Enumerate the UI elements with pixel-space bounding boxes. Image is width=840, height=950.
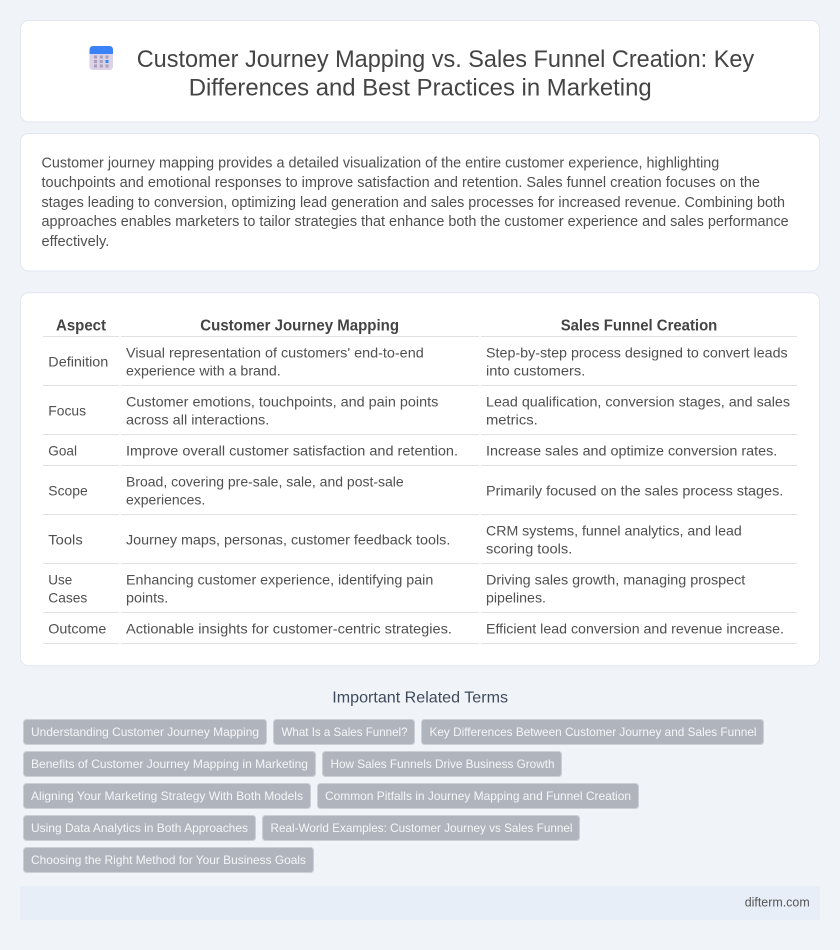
tag: real-world examples (262, 816, 580, 840)
tag: aligning strategy: Aligning Your Marketing Strategy With Both Models (31, 789, 303, 803)
tag: sales funnel: What Is a Sales Funnel? (282, 725, 408, 739)
panel: summary paragraph (20, 134, 820, 271)
tag: real-world examples: Real-World Examples: Customer Journey vs Sales Funnel (270, 821, 572, 835)
table header: Aspect (56, 318, 106, 335)
table header: Sales Funnel Creation (561, 318, 717, 335)
tag: common pitfalls: Common Pitfalls in Journey Mapping and Funnel Creation (325, 789, 631, 803)
tag: key differences: Key Differences Between Customer Journey and Sales Funnel (430, 725, 756, 739)
tag: benefits (24, 752, 316, 776)
text block: summary: approaches enables marketers to tailor strategies that enhance both the customer experience and sales performance (42, 214, 789, 230)
text block: summary (42, 156, 789, 250)
row: scope: Broad, covering pre-sale, sale, and post-sale (126, 474, 404, 490)
tag: data analytics: Using Data Analytics in Both Approaches (31, 821, 248, 835)
row: definition: Visual representation of customers' end-to-end (126, 344, 424, 360)
tag: benefits: Benefits of Customer Journey Mapping in Marketing (31, 757, 308, 771)
title: Customer Journey Mapping vs. Sales Funnel Creation: Key (137, 46, 754, 73)
tag: data analytics (24, 816, 256, 840)
text block: summary: effectively. (42, 234, 109, 250)
panel: title card (20, 20, 820, 122)
row: use cases: Use (48, 572, 72, 588)
row: outcome: Actionable insights for customer-centric strategies. (126, 621, 452, 637)
row: goal (48, 442, 777, 458)
row: goal: Increase sales and optimize conversion rates. (486, 442, 777, 458)
panel: comparison table (20, 293, 820, 666)
row: tools: Journey maps, personas, customer feedback tools. (126, 532, 450, 548)
title (137, 46, 754, 102)
row: use cases: Enhancing customer experience, identifying pain (126, 572, 433, 588)
row: scope: experiences. (126, 492, 205, 508)
row: scope (48, 474, 783, 508)
title: Differences and Best Practices in Marketing (189, 75, 652, 102)
table header: Customer Journey Mapping (200, 318, 399, 335)
tag: understanding: Understanding Customer Journey Mapping (31, 725, 259, 739)
tag: business growth (322, 752, 562, 776)
footer (20, 886, 820, 920)
row: focus: across all interactions. (126, 411, 269, 427)
row: use cases (48, 572, 745, 606)
row: use cases: pipelines. (486, 590, 546, 606)
heading: related terms: Important Related Terms (332, 689, 508, 706)
row: definition: into customers. (486, 362, 585, 378)
row: use cases: Driving sales growth, managing prospect (486, 572, 745, 588)
row: tools (48, 523, 742, 557)
row: scope: Scope (48, 483, 88, 499)
tag: choosing method (24, 848, 314, 872)
row: focus (48, 393, 790, 427)
row: focus: Focus (48, 402, 86, 418)
row: definition: experience with a brand. (126, 362, 281, 378)
row: scope: Primarily focused on the sales process stages. (486, 483, 783, 499)
table header (56, 318, 717, 335)
row: tools: CRM systems, funnel analytics, and lead (486, 523, 742, 539)
row: goal: Improve overall customer satisfaction and retention. (126, 442, 458, 458)
row: outcome: Outcome (48, 621, 107, 637)
tag: understanding (24, 720, 266, 744)
panel: related term tags (24, 720, 764, 872)
row: definition (48, 344, 788, 378)
row: definition: Definition (48, 354, 108, 370)
row: tools: Tools (48, 532, 83, 548)
row: goal: Goal (48, 442, 77, 458)
row: outcome: Efficient lead conversion and revenue increase. (486, 621, 784, 637)
row: definition: Step-by-step process designed to convert leads (486, 344, 788, 360)
row: outcome (48, 621, 784, 637)
row: focus: Lead qualification, conversion stages, and sales (486, 393, 790, 409)
tag: sales funnel (274, 720, 414, 744)
row: focus: Customer emotions, touchpoints, and pain points (126, 393, 438, 409)
footer: difterm.com (745, 895, 810, 910)
tag: business growth: How Sales Funnels Drive Business Growth (330, 757, 554, 771)
tag: common pitfalls (318, 784, 638, 808)
row: use cases: points. (126, 590, 168, 606)
text block: summary: Customer journey mapping provides a detailed visualization of the entire customer experience, highlighting (42, 156, 719, 172)
icon: calendar (90, 46, 113, 70)
tag: key differences (422, 720, 764, 744)
row: tools: scoring tools. (486, 541, 572, 557)
text block: summary: stages leading to conversion, optimizing lead generation and sales processes for increased revenue. Combining both (42, 195, 785, 211)
row: use cases: Cases (48, 590, 87, 606)
tag: choosing method: Choosing the Right Method for Your Business Goals (31, 853, 306, 867)
tag: aligning strategy (24, 784, 310, 808)
text block: summary: touchpoints and emotional responses to improve satisfaction and retention. Sales funnel creation focuses on the (42, 175, 760, 191)
row: focus: metrics. (486, 411, 538, 427)
